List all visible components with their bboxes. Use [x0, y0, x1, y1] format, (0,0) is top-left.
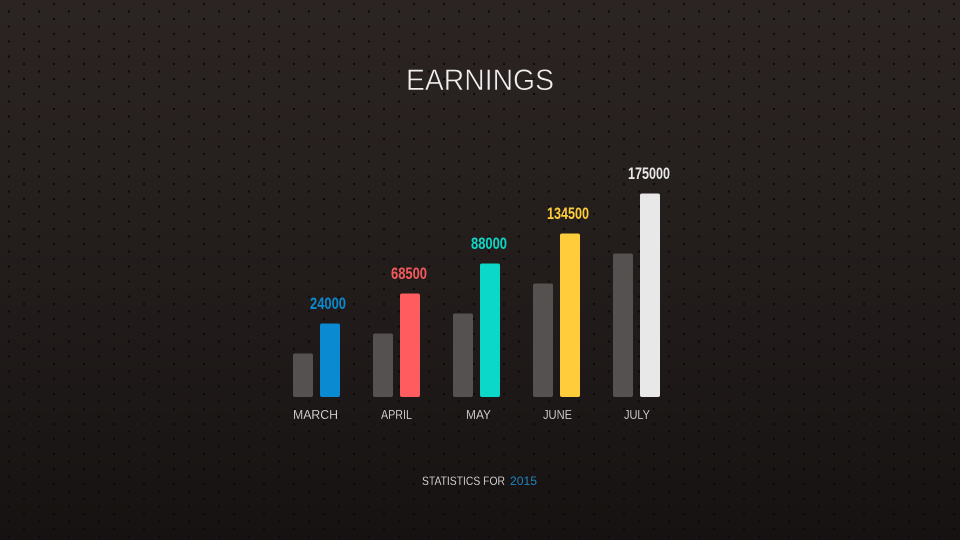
June group [533, 205, 589, 422]
April group: 68500 [391, 265, 427, 283]
March group [293, 295, 346, 422]
July group: JULY [624, 408, 651, 422]
July group [613, 165, 670, 422]
March group: MARCH [293, 408, 338, 422]
May group: 88000 [471, 235, 507, 253]
July group: 175000 [628, 165, 670, 183]
footer text: 2015 [510, 474, 537, 488]
May group: MAY [466, 408, 492, 422]
March group: 24000 [310, 295, 346, 313]
footer text: STATISTICS FOR [422, 474, 505, 488]
title: EARNINGS [406, 64, 554, 97]
May group [453, 235, 507, 422]
bar chart [293, 165, 670, 422]
June group: JUNE [543, 408, 572, 422]
June group: 134500 [547, 205, 589, 223]
April group: APRIL [381, 408, 412, 422]
April group [373, 265, 427, 422]
